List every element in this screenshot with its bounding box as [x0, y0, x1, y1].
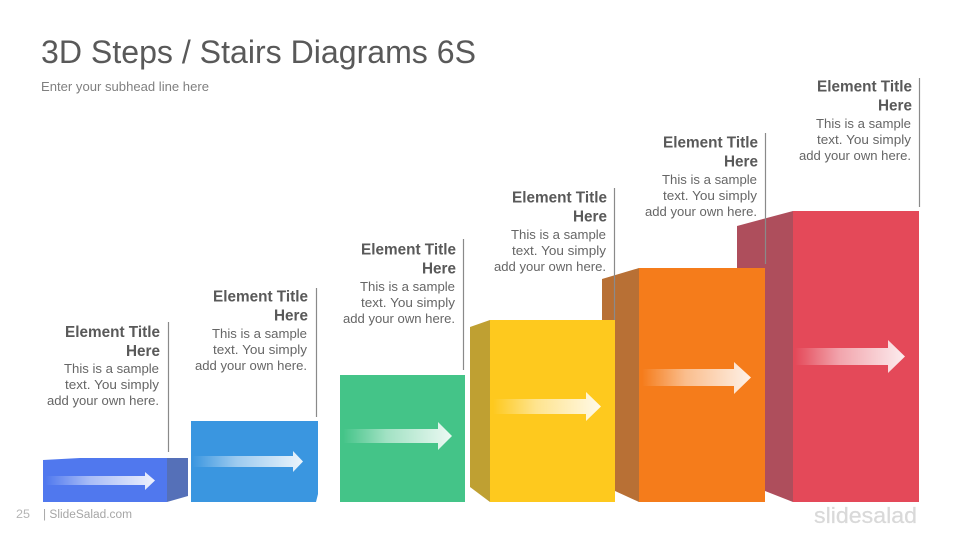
callout 4: [494, 188, 614, 320]
callout 3: Here: [422, 260, 456, 278]
step 2: blue: [191, 421, 318, 502]
callout 6: [799, 78, 920, 207]
callout 5: Element Title: [663, 134, 758, 152]
step 5: orange: [602, 268, 765, 502]
arrow 6: [795, 340, 905, 373]
callout 4: This is a sample: [511, 228, 606, 242]
callout 2: This is a sample: [212, 327, 307, 341]
callout 5: Here: [724, 154, 758, 170]
title: 3D Steps / Stairs Diagrams 6S: [41, 34, 476, 70]
callout 6: Here: [878, 98, 912, 114]
arrow 1: [45, 472, 155, 490]
callout 6: add your own here.: [799, 149, 911, 163]
callout 1: [47, 322, 168, 452]
callout 2: add your own here.: [195, 359, 307, 373]
callout 2: text. You simply: [213, 343, 308, 357]
callout 1: This is a sample: [64, 362, 159, 376]
callout 1: add your own here.: [47, 394, 159, 408]
footer site name: | SlideSalad.com: [43, 509, 132, 521]
callout 5: add your own here.: [645, 205, 757, 219]
logo wordmark: slidesalad: [814, 503, 917, 528]
callout 4: Element Title: [512, 190, 607, 206]
callout 3: This is a sample: [360, 280, 455, 294]
arrow 5: [642, 362, 751, 394]
arrow 2: [192, 451, 303, 472]
callout 5: [645, 133, 766, 264]
arrow 4: [493, 392, 601, 421]
callout 6: Element Title: [817, 78, 912, 96]
callout 1: Element Title: [65, 324, 160, 341]
callout 1: text. You simply: [65, 378, 160, 392]
callout 5: This is a sample: [662, 173, 757, 187]
callout 1: Here: [126, 343, 160, 360]
callout 5: text. You simply: [663, 189, 758, 203]
callout 3: [343, 239, 464, 370]
step 1: indigo: [43, 458, 188, 502]
page number: 25: [16, 509, 30, 521]
step 6: red: [737, 211, 919, 502]
callout 2: Here: [274, 308, 308, 324]
callout 4: text. You simply: [512, 244, 607, 258]
arrow 3: [343, 422, 452, 450]
callout 3: Element Title: [361, 242, 456, 258]
callout 2: [195, 288, 316, 417]
step 4: yellow: [470, 320, 615, 502]
callout 4: add your own here.: [494, 260, 606, 274]
step 3: green: [340, 375, 465, 502]
callout 4: Here: [573, 208, 607, 226]
callout 6: This is a sample: [816, 117, 911, 131]
callout 3: add your own here.: [343, 312, 455, 326]
subhead: Enter your subhead line here: [41, 80, 209, 94]
callout 2: Element Title: [213, 288, 308, 306]
callout 3: text. You simply: [361, 296, 456, 310]
callout 6: text. You simply: [817, 133, 912, 147]
